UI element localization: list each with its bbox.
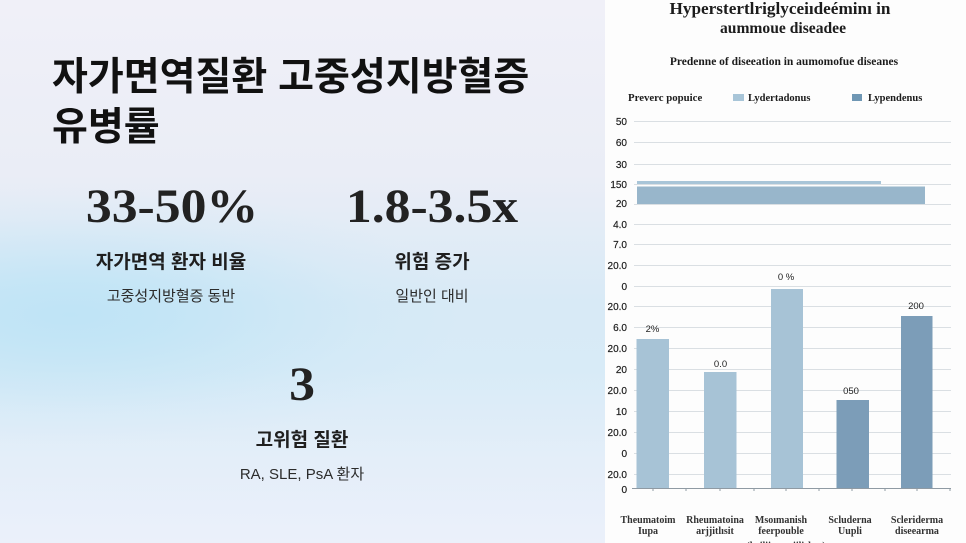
stat label: 자가면역 환자 비율 xyxy=(96,252,246,273)
y axis labels: 0 xyxy=(621,485,627,496)
panel: key statistics xyxy=(0,0,605,543)
x axis xyxy=(632,488,951,491)
stat: 1.8-3.5x xyxy=(346,180,518,305)
stat value: 3 xyxy=(289,358,315,411)
y axis labels: 20.0 xyxy=(608,344,627,355)
bar value labels: 050 xyxy=(843,386,859,397)
legend: Lypendenus xyxy=(868,93,922,104)
category labels: Theumatoim xyxy=(620,515,676,526)
y axis labels: 60 xyxy=(616,138,627,149)
stat label: 위험 증가 xyxy=(394,252,470,273)
chart title xyxy=(670,0,891,37)
stat value: 33-50% xyxy=(86,180,258,233)
legend xyxy=(628,92,922,104)
category labels: Iupa xyxy=(638,526,658,537)
category labels xyxy=(620,515,943,543)
category labels: feerpouble xyxy=(758,526,804,537)
stat note: 일반인 대비 xyxy=(395,288,469,305)
category labels: Uupli xyxy=(838,526,862,537)
panel: chart xyxy=(608,0,951,543)
bar value labels: 0.0 xyxy=(714,359,727,370)
y axis labels: 50 xyxy=(616,117,627,128)
stat value: 1.8-3.5x xyxy=(346,180,518,233)
category labels: Scluderna xyxy=(828,515,872,526)
y axis labels: 20.0 xyxy=(608,386,627,397)
y axis labels: 6.0 xyxy=(613,323,627,334)
bar value labels: 0 % xyxy=(778,272,795,283)
y axis labels: 0 xyxy=(621,449,627,460)
vertical bars xyxy=(636,289,932,488)
stat note: RA, SLE, PsA 환자 xyxy=(240,466,364,483)
category labels: Scleriderma xyxy=(891,515,943,526)
y axis labels: 20.0 xyxy=(608,470,627,481)
legend: Lydertadonus xyxy=(748,93,810,104)
y axis labels: 10 xyxy=(616,407,627,418)
title xyxy=(52,56,529,149)
category labels: diseearma xyxy=(895,526,939,537)
y axis labels: 20 xyxy=(616,365,627,376)
stat label: 고위험 질환 xyxy=(256,430,348,451)
y axis labels: 20.0 xyxy=(608,302,627,313)
horizontal bars xyxy=(637,181,925,204)
bar value labels: 200 xyxy=(908,301,924,312)
category labels: Msoımanish xyxy=(755,515,808,526)
title: 유병률 xyxy=(52,106,160,149)
y axis labels: 7.0 xyxy=(613,240,627,251)
y axis labels: 20.0 xyxy=(608,428,627,439)
stat: 3 xyxy=(240,358,364,483)
y axis labels: 4.0 xyxy=(613,220,627,231)
y axis labels: 0 xyxy=(621,282,627,293)
y axis labels: 30 xyxy=(616,160,627,171)
y axis labels: 150 xyxy=(610,180,627,191)
chart title: aummoue diseadee xyxy=(720,20,846,37)
y axis labels xyxy=(608,117,627,496)
stat note: 고중성지방혈증 동반 xyxy=(107,288,235,305)
stat: 33-50% xyxy=(86,180,258,305)
legend: Preverc popuice xyxy=(628,92,702,104)
title: 자가면역질환 고중성지방혈증 xyxy=(52,56,529,99)
chart subtitle: Predenne of diseeation in aumomofue diseanes xyxy=(670,56,899,68)
bar value labels xyxy=(646,272,924,397)
category labels: arjjitlısit xyxy=(696,526,735,537)
category labels: Rheumatoina xyxy=(686,515,744,526)
y axis labels: 20 xyxy=(616,199,627,210)
y axis labels: 20.0 xyxy=(608,261,627,272)
bar value labels: 2% xyxy=(646,324,660,335)
